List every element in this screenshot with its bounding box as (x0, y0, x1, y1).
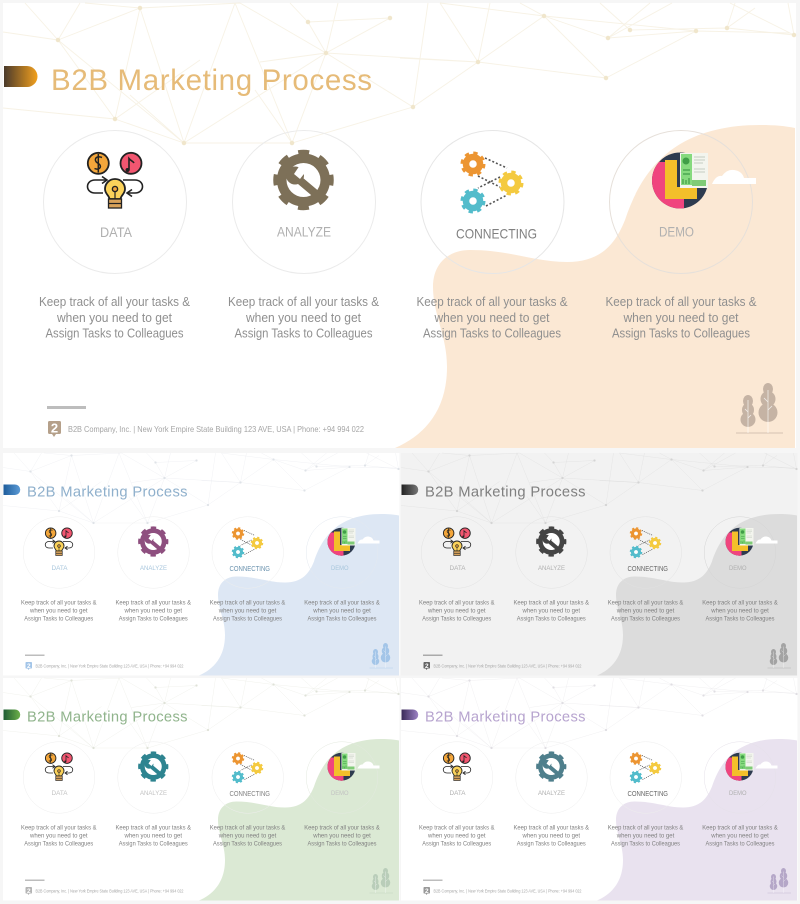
title marker tab (402, 710, 418, 720)
title marker tab (4, 710, 20, 720)
network line pattern (401, 678, 796, 748)
step: connecting: when you need to get (616, 832, 674, 840)
step: data: Keep track of all your tasks & (419, 824, 495, 832)
step: demo: Assign Tasks to Colleagues (706, 615, 775, 622)
step: data (39, 130, 190, 340)
step: demo: Keep track of all your tasks & (606, 294, 757, 309)
step: analyze: ANALYZE (538, 790, 565, 797)
step: data: Keep track of all your tasks & (39, 294, 190, 309)
step: analyze: Keep track of all your tasks & (116, 600, 192, 606)
footer: 2 (425, 663, 429, 670)
step: analyze: when you need to get (124, 608, 182, 614)
step: analyze: ANALYZE (140, 565, 167, 572)
footer (47, 406, 364, 437)
step: analyze (116, 742, 192, 847)
step: demo: DEMO (331, 790, 348, 797)
icon: trees (370, 868, 393, 893)
step: data: DATA (450, 790, 466, 797)
step: data: DATA (52, 790, 68, 797)
slide background (3, 3, 796, 448)
step: data (419, 517, 495, 622)
footer: 2 (51, 420, 58, 436)
step: analyze: Keep track of all your tasks & (116, 824, 192, 832)
step: analyze: Assign Tasks to Colleagues (517, 840, 586, 847)
footer: B2B Company, Inc. | New York Empire State Building 123 AVE, USA | Phone: +94 994 022 (434, 664, 582, 668)
step: data: DATA (100, 225, 132, 240)
grey blob background (597, 514, 797, 676)
footer (423, 880, 582, 895)
footer: 2 (27, 888, 31, 895)
step: connecting (416, 130, 568, 340)
icon: wrench gear (276, 153, 330, 207)
icon: trees (768, 868, 791, 893)
step: analyze: ANALYZE (538, 565, 565, 572)
step: demo: when you need to get (312, 608, 371, 614)
step: demo: DEMO (729, 565, 746, 572)
step: connecting: Assign Tasks to Colleagues (213, 840, 283, 847)
step: analyze: Assign Tasks to Colleagues (119, 615, 188, 622)
step: demo: Assign Tasks to Colleagues (706, 840, 775, 847)
step: analyze: Assign Tasks to Colleagues (517, 615, 586, 622)
step: connecting (608, 517, 684, 622)
step: connecting: Keep track of all your tasks & (210, 600, 286, 606)
slide background (3, 678, 400, 900)
blue blob background (199, 514, 399, 676)
step: data: Keep track of all your tasks & (419, 600, 495, 606)
step: connecting: Keep track of all your tasks & (416, 294, 568, 309)
step: analyze: ANALYZE (140, 790, 167, 797)
icon: trees (736, 383, 783, 433)
step: data: when you need to get (427, 832, 486, 840)
step: connecting (210, 742, 286, 847)
icon: cloud (712, 170, 756, 184)
step: analyze (514, 517, 590, 622)
network line pattern (3, 3, 794, 143)
icon: trees (370, 643, 393, 668)
title: B2B Marketing Process (425, 710, 586, 726)
step: data (419, 742, 495, 847)
footer (423, 654, 582, 670)
step: analyze: Assign Tasks to Colleagues (119, 840, 188, 847)
step: demo: Assign Tasks to Colleagues (612, 326, 750, 340)
step: demo: DEMO (729, 790, 746, 797)
panel: grey slide (401, 453, 798, 676)
step: connecting: CONNECTING (456, 226, 537, 242)
step: analyze: Keep track of all your tasks & (228, 294, 379, 309)
panel: green slide (3, 678, 400, 900)
panel: blue slide (3, 453, 400, 676)
panel: orange main slide (3, 3, 796, 448)
title: B2B Marketing Process (27, 484, 188, 500)
step: demo: when you need to get (312, 832, 371, 840)
footer: 2 (425, 888, 429, 895)
step: data: DATA (450, 565, 466, 572)
step: analyze: ANALYZE (277, 224, 331, 240)
title: B2B Marketing Process (27, 710, 188, 726)
panel: purple slide (401, 678, 798, 900)
step: demo: when you need to get (623, 310, 739, 325)
footer: B2B Company, Inc. | New York Empire State Building 123 AVE, USA | Phone: +94 994 022 (36, 888, 184, 894)
step: demo: when you need to get (710, 608, 769, 614)
step: demo: Assign Tasks to Colleagues (308, 840, 377, 847)
step: demo: Keep track of all your tasks & (702, 600, 778, 606)
step: connecting (210, 517, 286, 622)
step: demo: Keep track of all your tasks & (304, 600, 380, 606)
step: data: Assign Tasks to Colleagues (24, 615, 94, 622)
step: connecting: Assign Tasks to Colleagues (423, 326, 561, 340)
step: data (21, 517, 97, 622)
footer: 2 (27, 663, 31, 670)
step: connecting: when you need to get (218, 832, 276, 840)
step: connecting: when you need to get (434, 310, 550, 325)
step: data: Assign Tasks to Colleagues (422, 615, 492, 622)
icon: demo document (650, 150, 712, 212)
step: data (21, 742, 97, 847)
icon: connected gears (462, 154, 522, 212)
icon: trees (768, 643, 791, 668)
title marker tab (4, 484, 20, 495)
title marker tab (402, 484, 418, 495)
step: analyze: when you need to get (522, 608, 580, 614)
step: analyze: Assign Tasks to Colleagues (234, 326, 373, 340)
step: connecting (608, 742, 684, 847)
step: demo: DEMO (331, 565, 348, 572)
step: data: Keep track of all your tasks & (21, 600, 97, 606)
step: connecting: Assign Tasks to Colleagues (213, 615, 283, 622)
step: data: when you need to get (29, 608, 88, 614)
step: connecting: Keep track of all your tasks & (608, 824, 684, 832)
step: data: when you need to get (29, 832, 88, 840)
step: analyze: Keep track of all your tasks & (514, 824, 590, 832)
step: analyze: when you need to get (245, 310, 361, 325)
step: demo (304, 517, 380, 622)
network line pattern (3, 678, 398, 748)
step: analyze: Keep track of all your tasks & (514, 600, 590, 606)
step: data: when you need to get (56, 310, 172, 325)
step: demo (606, 130, 757, 340)
step: analyze: when you need to get (124, 832, 182, 840)
step: analyze (228, 130, 379, 340)
slide background (401, 678, 798, 900)
step: demo: Keep track of all your tasks & (304, 824, 380, 832)
footer (25, 880, 184, 895)
step: connecting: CONNECTING (230, 791, 270, 798)
footer (25, 654, 184, 670)
title: B2B Marketing Process (51, 64, 372, 97)
step: connecting: CONNECTING (230, 566, 270, 573)
step: connecting: Keep track of all your tasks & (210, 824, 286, 832)
purple blob background (597, 739, 797, 900)
network line pattern (401, 453, 796, 523)
step: connecting: Assign Tasks to Colleagues (611, 615, 681, 622)
step: connecting: when you need to get (218, 608, 276, 614)
slide background (3, 453, 400, 676)
step: analyze (514, 742, 590, 847)
title: B2B Marketing Process (425, 484, 586, 500)
step: demo: Assign Tasks to Colleagues (308, 615, 377, 622)
step: demo: Keep track of all your tasks & (702, 824, 778, 832)
step: demo (702, 517, 778, 622)
step: data: DATA (52, 565, 68, 572)
green blob background (199, 739, 399, 900)
step: connecting: CONNECTING (628, 791, 668, 798)
footer: B2B Company, Inc. | New York Empire State Building 123 AVE, USA | Phone: +94 994 022 (36, 664, 184, 668)
step: data: Assign Tasks to Colleagues (46, 326, 184, 340)
slide background (401, 453, 798, 676)
title marker tab (4, 66, 37, 87)
icon: idea loop with coin and music (88, 153, 142, 208)
step: demo (702, 742, 778, 847)
peach blob background (395, 125, 795, 448)
network line pattern (3, 453, 398, 523)
step: connecting: when you need to get (616, 608, 674, 614)
step: analyze (116, 517, 192, 622)
step: connecting: Assign Tasks to Colleagues (611, 840, 681, 847)
step: demo (304, 742, 380, 847)
step: demo: DEMO (659, 224, 694, 240)
step: data: when you need to get (427, 608, 486, 614)
step: data: Assign Tasks to Colleagues (24, 840, 94, 847)
step: data: Assign Tasks to Colleagues (422, 840, 492, 847)
step: analyze: when you need to get (522, 832, 580, 840)
step: connecting: Keep track of all your tasks & (608, 600, 684, 606)
footer: B2B Company, Inc. | New York Empire State Building 123 AVE, USA | Phone: +94 994 022 (434, 888, 582, 894)
step: demo: when you need to get (710, 832, 769, 840)
footer: B2B Company, Inc. | New York Empire State Building 123 AVE, USA | Phone: +94 994 022 (68, 424, 364, 434)
step: data: Keep track of all your tasks & (21, 824, 97, 832)
step: connecting: CONNECTING (628, 566, 668, 573)
